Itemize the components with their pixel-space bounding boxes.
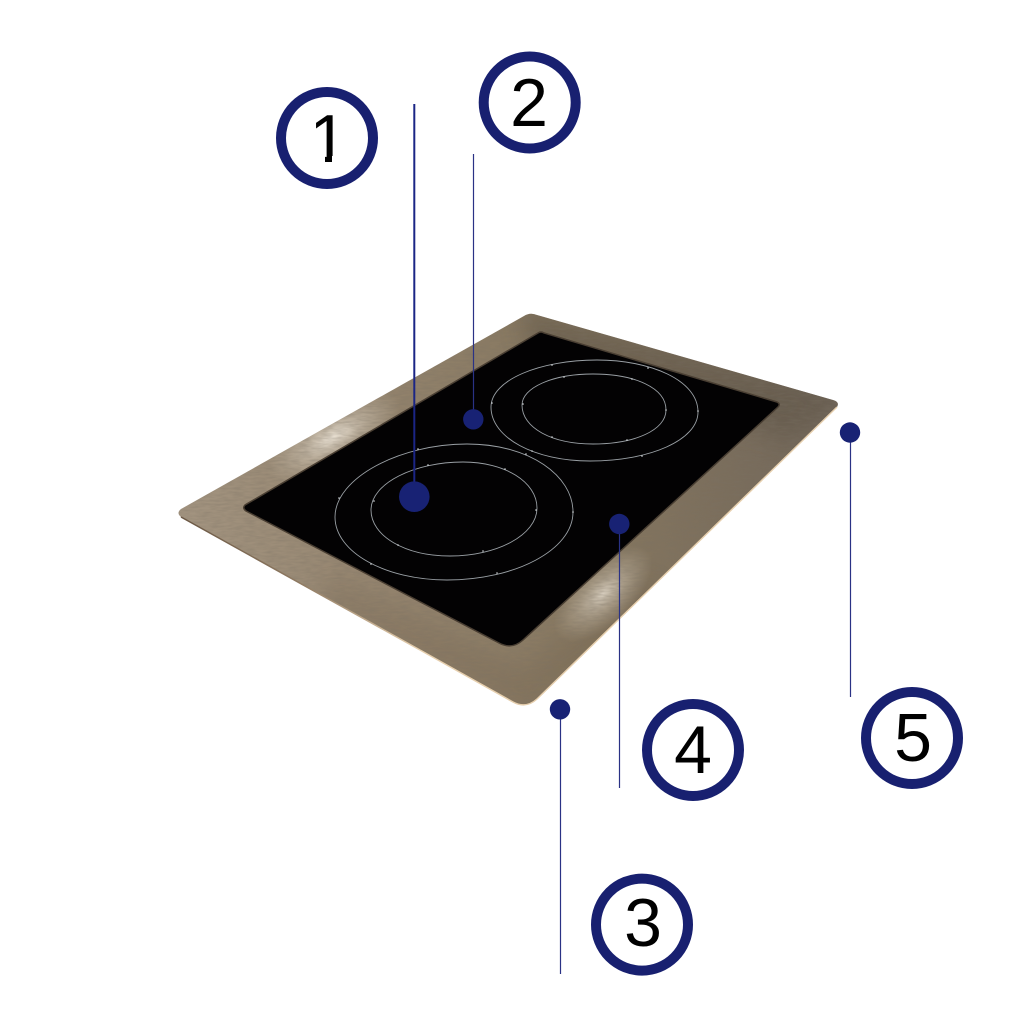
front cooking zone bbox=[335, 444, 573, 580]
leader line 2 bbox=[472, 154, 474, 419]
rear cooking zone bbox=[491, 360, 698, 461]
callout 4 bbox=[609, 514, 739, 796]
number 1: 1 bbox=[310, 101, 347, 177]
frame lower-left edge bbox=[181, 517, 420, 650]
callout 3 bbox=[550, 699, 688, 974]
marker dot 4 bbox=[609, 514, 630, 534]
brushed metal grain bbox=[178, 332, 838, 622]
front inner ring bbox=[371, 462, 537, 556]
darker lower band bbox=[330, 587, 562, 702]
glass panel bbox=[244, 332, 779, 646]
steel frame bbox=[178, 314, 838, 705]
callout 1 bbox=[281, 92, 430, 512]
rear zone node points bbox=[491, 364, 699, 457]
number badge 3 bbox=[596, 879, 688, 971]
leader line 4 bbox=[618, 524, 620, 788]
rear outer ring bbox=[491, 360, 698, 461]
marker dot 1 bbox=[399, 481, 430, 512]
number badge 5 bbox=[866, 692, 958, 784]
frame shading and glare bbox=[170, 305, 850, 720]
rear inner ring bbox=[522, 374, 666, 444]
frame lower-right edge bbox=[420, 407, 837, 705]
front zone node points bbox=[338, 448, 574, 574]
leader line 1 bbox=[413, 104, 415, 497]
front outer ring bbox=[335, 444, 573, 580]
glare on left edge bbox=[276, 399, 391, 476]
number 5: 5 bbox=[894, 700, 932, 776]
glare on right edge bbox=[560, 552, 646, 636]
darker top-right band bbox=[518, 314, 838, 433]
callout 5 bbox=[840, 422, 958, 784]
callout 2 bbox=[463, 56, 576, 429]
number badge 1 bbox=[281, 92, 373, 184]
diagram: two-zone cooktop with numbered callouts bbox=[178, 52, 963, 976]
number 2: 2 bbox=[510, 65, 548, 141]
leader line 3 bbox=[560, 709, 562, 974]
number 4: 4 bbox=[674, 712, 712, 788]
marker dot 3 bbox=[550, 699, 570, 720]
marker dot 5 bbox=[840, 422, 860, 443]
leader line 5 bbox=[850, 432, 852, 697]
cooktop bbox=[170, 305, 850, 720]
marker dot 2 bbox=[463, 409, 483, 429]
number 3: 3 bbox=[624, 885, 662, 961]
number badge 4 bbox=[647, 704, 739, 796]
number badge 2 bbox=[484, 56, 576, 148]
